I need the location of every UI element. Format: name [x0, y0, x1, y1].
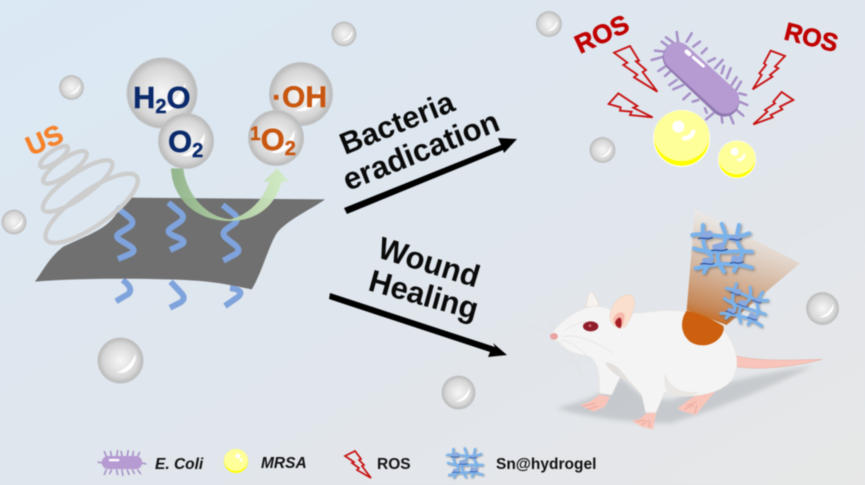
hydrogel network — [692, 224, 752, 272]
panel: mouse with hydrogel — [530, 209, 822, 429]
heading: bacteria eradication: Bacteria — [335, 84, 460, 161]
product: singlet oxygen bubble: 2 — [285, 138, 296, 160]
heading: bacteria eradication: eradication — [338, 104, 504, 197]
mouse chest shading — [605, 363, 642, 394]
legend label: E. Coli: E. Coli — [155, 456, 204, 473]
mouse whiskers — [530, 310, 613, 377]
product: singlet oxygen bubble: O — [261, 122, 285, 157]
legend icon: E. coli — [98, 451, 146, 475]
arrow: to bacteria — [344, 138, 517, 214]
upper wavy chains — [117, 203, 238, 261]
legend icon: ROS bolt — [345, 451, 371, 478]
mouse belly shading — [664, 373, 700, 396]
legend icon: MRSA — [224, 449, 248, 473]
ROS labels: ROS — [570, 8, 634, 59]
label: US: US — [21, 119, 68, 161]
hydrogel cone — [687, 209, 800, 325]
heading: wound healing — [365, 230, 484, 327]
product: singlet oxygen bubble: 1 — [250, 124, 261, 145]
legend — [98, 448, 596, 478]
mouse near front paw — [580, 395, 610, 412]
wound site — [682, 311, 724, 345]
arrow: to wound — [329, 293, 507, 357]
floating bubbles — [2, 11, 839, 410]
lower wavy chains — [116, 280, 240, 308]
mouse hind paw — [677, 392, 715, 415]
reactant: O2 bubble: O — [168, 124, 192, 159]
mouse eye — [583, 321, 598, 331]
mouse shadow — [557, 366, 813, 423]
ROS labels — [570, 8, 841, 59]
panel: sonodynamic sheet — [35, 142, 325, 308]
reactant: O2 bubble — [158, 113, 214, 169]
icon: MRSA large coccus — [654, 110, 710, 166]
mouse nose — [550, 333, 558, 340]
icon: lightning bolts — [609, 46, 793, 124]
reactant: O2 bubble: 2 — [192, 140, 203, 162]
legend label: MRSA: MRSA — [261, 455, 307, 472]
icon: MRSA small coccus — [718, 141, 756, 178]
product: singlet oxygen bubble — [248, 110, 304, 166]
heading: wound healing: Wound — [374, 230, 484, 294]
panel: bacteria — [609, 32, 793, 178]
reactant: H2O bubble: O — [167, 80, 191, 115]
legend label: ROS: ROS — [377, 456, 411, 473]
product: OH bubble: ·OH — [272, 81, 327, 114]
icon: E. coli bacterium — [652, 32, 747, 123]
mouse front paw — [632, 413, 656, 429]
hydrogel network small — [718, 280, 772, 329]
ultrasound rings — [37, 142, 147, 254]
ROS labels: ROS — [782, 18, 841, 58]
mouse body — [551, 306, 737, 413]
reactant: H2O bubble: 2 — [155, 96, 167, 118]
product: OH bubble — [269, 62, 333, 126]
mouse far ear — [586, 292, 599, 307]
legend label: Sn@hydrogel: Sn@hydrogel — [496, 456, 596, 473]
reactant: H2O bubble — [126, 58, 198, 128]
mouse near ear — [610, 295, 634, 328]
reactant: H2O bubble: H — [133, 80, 155, 115]
mouse tail — [736, 356, 822, 368]
curved reaction arrow — [171, 168, 288, 221]
legend icon: Sn@hydrogel — [447, 448, 483, 477]
heading: wound healing: Healing — [365, 263, 482, 327]
graphene sheet — [35, 198, 325, 289]
